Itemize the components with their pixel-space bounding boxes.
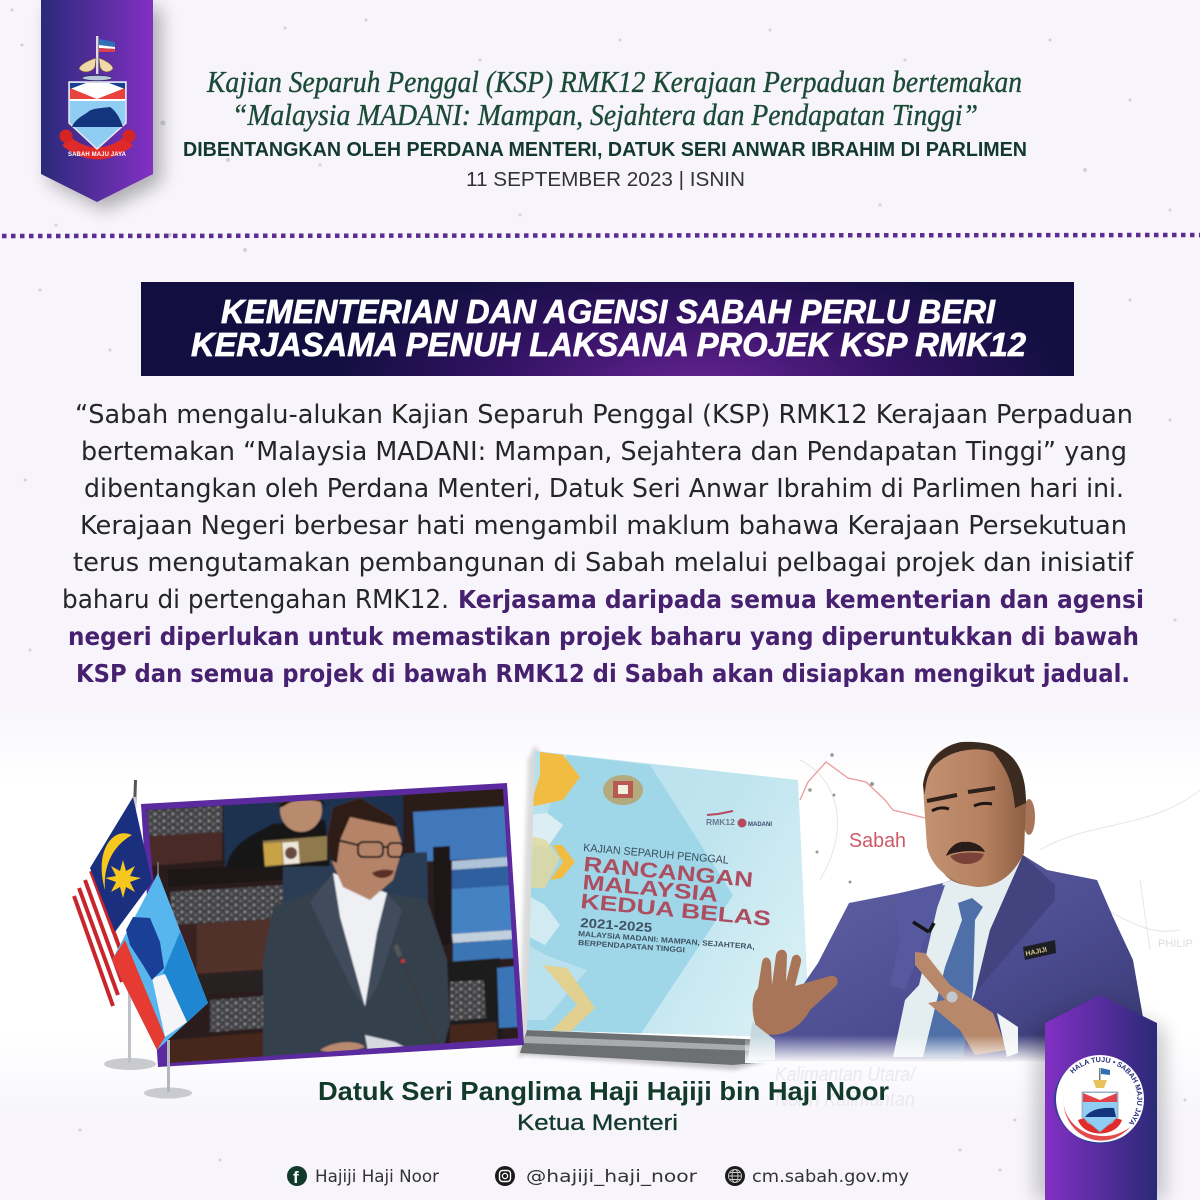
crest motto: SABAH MAJU JAYA (68, 152, 127, 158)
seated woman (226, 800, 330, 868)
instagram handle: @hajiji_haji_noor (526, 1167, 697, 1187)
facebook name: Hajiji Haji Noor (315, 1167, 439, 1187)
flag: Malaysia (73, 780, 156, 1070)
book logos: MADANI (748, 822, 772, 828)
report book (518, 745, 810, 1070)
map label: Philippines: PHILIP (1158, 938, 1193, 950)
website: cm.sabah.gov.my (752, 1167, 909, 1187)
eyebrows (927, 788, 995, 801)
book title: MALAYSIA (582, 871, 719, 907)
moustache (946, 842, 985, 856)
highlighted quote (68, 585, 1144, 688)
book title: RANCANGAN (583, 853, 754, 892)
minister name: Datuk Seri Panglima Haji Hajiji bin Haji Noor (318, 1076, 889, 1106)
book logos (706, 811, 772, 828)
social links footer (287, 1166, 909, 1187)
bottom ribbon with logo (1026, 995, 1174, 1200)
name tag (1023, 940, 1056, 960)
book title (578, 842, 772, 954)
head (923, 743, 1026, 887)
eyes (932, 803, 992, 811)
minister title: Ketua Menteri (517, 1110, 678, 1135)
book title: KAJIAN SEPARUH PENGGAL (583, 842, 729, 867)
left hand (753, 950, 838, 1035)
highlighted quote: Kerjasama daripada semua kementerian dan agensi (458, 585, 1144, 614)
blue backdrop (412, 805, 514, 963)
lapel (975, 855, 1055, 993)
blue seats (223, 794, 403, 867)
header titles (183, 64, 1027, 191)
suit (752, 855, 1144, 1062)
man speaking (263, 798, 450, 1060)
logo: Hala Tuju Sabah Maju Jaya (1054, 1055, 1144, 1144)
hair (923, 742, 1026, 808)
microphone (393, 944, 438, 1050)
map label: Sabah: Sabah (849, 830, 906, 852)
icon: Sabah coat of arms (60, 36, 136, 158)
book title: 2021-2025 (580, 915, 653, 935)
lapel mic (913, 922, 934, 932)
quote body text: bertemakan “Malaysia MADANI: Mampan, Sejahtera dan Pendapatan Tinggi” yang (81, 437, 1127, 467)
quote body text: dibentangkan oleh Perdana Menteri, Datuk Seri Anwar Ibrahim di Parlimen hari ini. (84, 474, 1124, 504)
top ribbon with Sabah crest (41, 0, 161, 210)
headline line 1: KEMENTERIAN DAN AGENSI SABAH PERLU BERI (221, 293, 996, 330)
date: 11 SEPTEMBER 2023 | ISNIN (466, 169, 745, 191)
name tag: HAJIJI (1025, 947, 1048, 958)
quote body text: “Sabah mengalu-alukan Kajian Separuh Penggal (KSP) RMK12 Kerajaan Perpaduan (75, 400, 1133, 430)
icon: facebook (287, 1166, 307, 1187)
map backdrop (775, 753, 1200, 1111)
logo: Hala Tuju Sabah Maju Jaya: HALA TUJU • SABAH MAJU JAYA (1070, 1056, 1142, 1124)
quote body text: baharu di pertengahan RMK12. (62, 585, 449, 615)
icon: facebook: f (293, 1168, 299, 1187)
right hand (915, 952, 1007, 1055)
book crest (603, 775, 643, 805)
book title: KEDUA BELAS (580, 890, 772, 931)
photo: Prime Minister in Parliament (140, 783, 525, 1070)
book title: BERPENDAPATAN TINGGI (578, 938, 685, 954)
quote body text (62, 400, 1144, 688)
nameplate (263, 836, 327, 867)
ear (1023, 799, 1035, 835)
map label: Kalimantan Utara: Kalimantan Utara/ (775, 1064, 917, 1086)
quote body text: Kerajaan Negeri berbesar hati mengambil maklum bahawa Kerajaan Persekutuan (80, 511, 1127, 541)
subtitle: DIBENTANGKAN OLEH PERDANA MENTERI, DATUK SERI ANWAR IBRAHIM DI PARLIMEN (183, 139, 1027, 161)
map label: North Kalimantan: North Kalimantan (775, 1089, 915, 1111)
icon: instagram (495, 1166, 515, 1186)
shirt (893, 858, 1023, 1057)
quote body text: terus mengutamakan pembangunan di Sabah melalui pelbagai projek dan inisiatif (73, 548, 1134, 578)
parliament wood panels (147, 806, 284, 1063)
crest shield (69, 82, 126, 149)
flag: Sabah (112, 862, 208, 1098)
headline line 2: KERJASAMA PENUH LAKSANA PROJEK KSP RMK12 (191, 326, 1027, 363)
photo: Chief Minister (745, 742, 1145, 1063)
bottom fade (745, 1035, 1145, 1063)
title line 1: Kajian Separuh Penggal (KSP) RMK12 Kerajaan Perpaduan bertemakan (206, 64, 1022, 99)
crest scroll (60, 130, 136, 154)
book title: MALAYSIA MADANI: MAMPAN, SEJAHTERA, (578, 929, 755, 951)
neck (943, 840, 1023, 885)
title line 2: “Malaysia MADANI: Mampan, Sejahtera dan Pendapatan Tinggi” (232, 97, 978, 132)
headline banner (141, 282, 1074, 376)
icon: website globe (725, 1166, 745, 1186)
highlighted quote: negeri diperlukan untuk memastikan projek baharu yang diperuntukkan di bawah (68, 622, 1139, 651)
mouth (950, 853, 984, 864)
right desk (433, 846, 518, 1050)
tie (923, 898, 983, 1057)
book logos: RMK12 (706, 817, 735, 827)
cuffs (997, 1013, 1018, 1057)
